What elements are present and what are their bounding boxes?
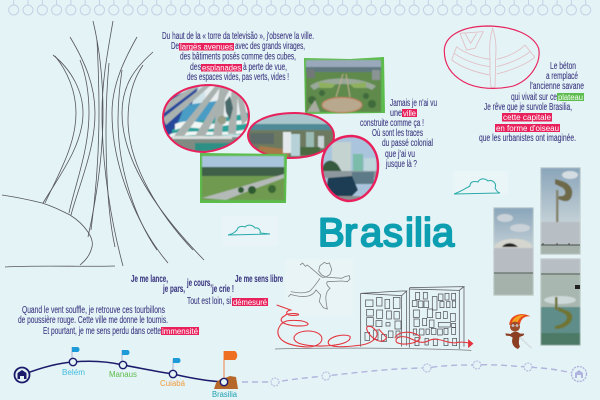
text block: le béton: en forme d'oiseau bbox=[496, 124, 559, 133]
character: red-haired gnome bbox=[505, 314, 532, 349]
text block: torre da televisão: des bbox=[190, 62, 201, 73]
text block: torre da televisão: Du haut de la « torre da televisão », j'observe la ville. bbox=[162, 31, 314, 42]
text block: jamais: jusque là ? bbox=[385, 159, 417, 170]
bird plan sketch in red oval bbox=[444, 26, 539, 88]
text block: torre da televisão: largës avenues bbox=[180, 42, 233, 52]
title: Brasilia bbox=[318, 211, 455, 255]
stop: Brasilia current: Brasilia bbox=[212, 390, 238, 399]
photo: green-framed avenue bbox=[200, 153, 287, 203]
icon: cloud left bbox=[222, 216, 278, 246]
stop: Manaus: Manaus bbox=[109, 370, 137, 379]
text block: le béton: qui vivait sur ce bbox=[511, 92, 557, 103]
text block: je me lance: je cours, bbox=[186, 278, 212, 289]
text block: le béton bbox=[479, 61, 584, 144]
text block: jamais: du passé colonial bbox=[382, 138, 433, 149]
text block: torre da televisão: des espaces vides, pas verts, vides ! bbox=[187, 72, 289, 83]
photo: dome and water bbox=[493, 207, 534, 296]
icon: home start bbox=[14, 368, 30, 382]
text block: torre da televisão: avec des grands virages, bbox=[235, 41, 305, 52]
photo: apartment towers in red blob bbox=[248, 110, 336, 160]
text block: quand le vent souffle bbox=[18, 305, 199, 337]
text block: jamais bbox=[360, 98, 437, 170]
photo: green-framed esplanade bbox=[304, 57, 385, 114]
text block: jamais: construite comme ça ! bbox=[360, 118, 424, 129]
text block: torre da televisão: De bbox=[171, 41, 179, 52]
text block: je me lance: je crie ! bbox=[211, 284, 234, 295]
text block: quand le vent souffle: immensité bbox=[162, 327, 199, 336]
text block: quand le vent souffle: Et pourtant, je me sens perdu dans cette bbox=[43, 326, 161, 337]
icon: cloud right bbox=[453, 171, 508, 195]
text block: le béton: plateau bbox=[558, 93, 583, 102]
running figure sketch bbox=[285, 259, 353, 316]
text block: le béton: Le béton bbox=[550, 61, 576, 72]
text block: torre da televisão: des bâtiments posés comme des cubes, bbox=[180, 52, 296, 62]
photo: parked cars in red blob bbox=[320, 135, 382, 204]
notebook rings bbox=[9, 0, 591, 15]
text block: jamais: ville bbox=[403, 109, 417, 118]
photo: monument arch bbox=[540, 167, 581, 255]
stop: Manaus bbox=[109, 350, 137, 379]
text block: jamais: que j'ai vu bbox=[385, 149, 415, 160]
text block: je me lance: Je me lance, bbox=[131, 274, 168, 285]
text block: torre da televisão: esplanades bbox=[202, 64, 241, 72]
photo: cathedral interior in red blob bbox=[160, 82, 252, 154]
stop: Cuiabá: Cuiabá bbox=[160, 379, 186, 388]
text block: jamais: Jamais je n'ai vu bbox=[390, 98, 437, 109]
stop: Belém: Belém bbox=[62, 368, 85, 377]
text block: quand le vent souffle: Quand le vent souffle, je retrouve ces tourbillons bbox=[22, 305, 165, 316]
photo: reflection in water bbox=[540, 258, 581, 346]
text block: torre da televisão: à perte de vue, bbox=[243, 62, 287, 73]
apartment buildings sketch bbox=[275, 287, 471, 350]
travelled route bbox=[22, 361, 224, 382]
stop: Cuiabá bbox=[160, 358, 186, 388]
cathedral line drawing bbox=[2, 21, 204, 267]
text block: je me lance: je pars, bbox=[162, 284, 185, 295]
text block: je me lance: Tout est loin, si bbox=[187, 296, 231, 307]
text block: je me lance: démesuré bbox=[233, 298, 268, 307]
text block: jamais: Où sont les traces bbox=[372, 128, 423, 139]
text block: le béton: a remplacé bbox=[546, 71, 578, 82]
text block: jamais: une bbox=[390, 108, 402, 119]
dashed future route bbox=[242, 361, 586, 386]
text block: torre da televisão bbox=[162, 31, 314, 83]
stop: Belém bbox=[62, 347, 85, 377]
stop: Brasilia current bbox=[212, 351, 238, 399]
text block: je me lance bbox=[131, 274, 287, 307]
red scribble trail bbox=[277, 305, 473, 347]
text block: quand le vent souffle: de poussière rouge. Cette ville me donne le tournis. bbox=[18, 315, 168, 326]
text block: je me lance: Je me sens libre ! bbox=[235, 274, 287, 285]
text block: le béton: cette capitale bbox=[503, 113, 552, 122]
